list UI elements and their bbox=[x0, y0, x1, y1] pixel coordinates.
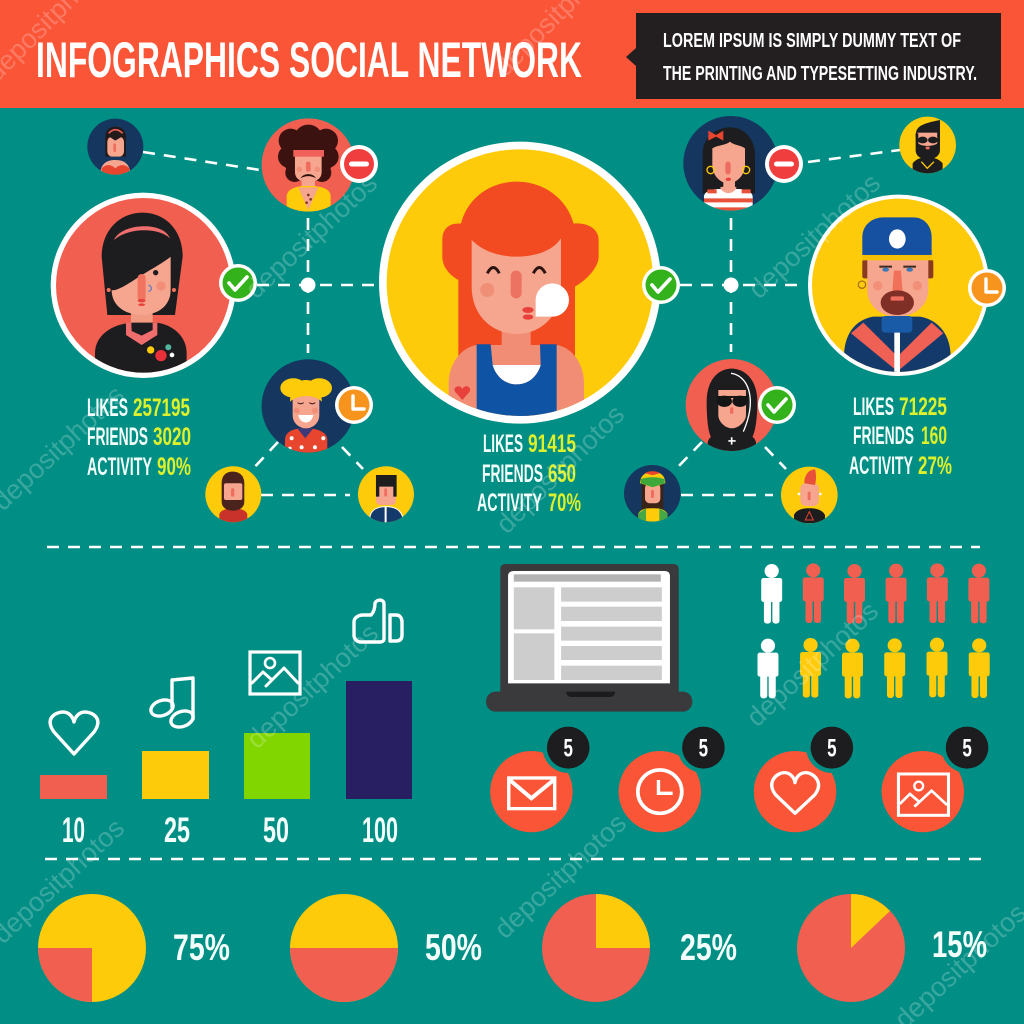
watermarks: depositphotos bbox=[741, 596, 884, 732]
avatar: woman with bow and striped top bbox=[683, 116, 778, 213]
stats: right person bbox=[849, 393, 952, 480]
clock badge: right bbox=[968, 269, 1006, 307]
header banner bbox=[0, 0, 1024, 108]
watermarks: depositphotos bbox=[241, 618, 384, 754]
stats: left person: LIKES bbox=[87, 394, 128, 422]
stats: left person: ACTIVITY bbox=[87, 453, 152, 481]
check badge: right bbox=[758, 386, 796, 424]
pie 15% bbox=[797, 894, 987, 1002]
minus badge: left bbox=[340, 145, 378, 183]
people pictogram rows bbox=[757, 563, 990, 698]
bar 100 with thumbs-up icon bbox=[346, 600, 412, 850]
stats: central person: 70% bbox=[548, 489, 581, 517]
notification: mail bbox=[490, 722, 594, 832]
watermarks: depositphotos bbox=[490, 399, 630, 539]
avatar: central woman with red hair bbox=[379, 142, 661, 424]
bar 25 with music icon: 25 bbox=[164, 811, 190, 850]
bar 25 with music icon bbox=[142, 678, 209, 850]
avatar: man with afro bbox=[262, 118, 355, 212]
bar 50 with image icon bbox=[244, 652, 310, 850]
stats: central person: 91415 bbox=[528, 430, 576, 458]
stats: right person: 27% bbox=[918, 452, 952, 480]
stats: central person: LIKES bbox=[483, 430, 523, 458]
clock badge: left bbox=[335, 386, 373, 424]
avatar: right man with blue cap bbox=[808, 195, 989, 377]
stats: right person: LIKES bbox=[853, 393, 894, 421]
avatar: woman in black hood with sunglasses bbox=[686, 359, 778, 453]
avatar: punk with mohawk bbox=[781, 467, 838, 523]
avatar: rasta man bbox=[624, 465, 681, 523]
bar chart bbox=[40, 600, 412, 850]
stats: right person: 71225 bbox=[899, 393, 947, 421]
bar 10 with heart icon: 10 bbox=[62, 811, 85, 850]
pie 25% bbox=[542, 894, 737, 1002]
check badge: central bbox=[642, 266, 680, 304]
stats: left person: 257195 bbox=[133, 394, 190, 422]
stats: left person: FRIENDS bbox=[87, 423, 148, 451]
watermarks: depositphotos bbox=[240, 168, 383, 304]
stats: central person: ACTIVITY bbox=[477, 489, 542, 517]
pie 50% bbox=[290, 894, 482, 1002]
avatar: man in track jacket bbox=[358, 466, 414, 523]
stats: right person: ACTIVITY bbox=[849, 452, 913, 480]
network connector lines bbox=[143, 150, 900, 495]
stats: central person: FRIENDS bbox=[482, 460, 543, 488]
watermarks: depositphotos bbox=[743, 168, 886, 304]
notification: mail: 5 bbox=[563, 735, 573, 762]
title: INFOGRAPHICS SOCIAL NETWORK bbox=[36, 32, 582, 88]
avatar: bearded man in plaid bbox=[205, 466, 261, 523]
notification: clock bbox=[619, 722, 729, 832]
notification: image: 5 bbox=[962, 735, 972, 762]
minus badge: right bbox=[765, 145, 803, 183]
stats: left person: 3020 bbox=[153, 423, 191, 451]
laptop bbox=[486, 564, 692, 712]
pie 15%: 15% bbox=[932, 924, 987, 965]
notification: heart bbox=[754, 722, 858, 832]
row: yellow people bbox=[757, 638, 990, 698]
notification: image bbox=[882, 722, 993, 832]
avatar: blonde girl in polka dots bbox=[262, 359, 355, 453]
bar 10 with heart icon bbox=[40, 712, 107, 850]
pie 25%: 25% bbox=[680, 927, 737, 968]
check badge: left bbox=[219, 264, 257, 302]
watermarks: depositphotos bbox=[489, 808, 632, 944]
pie 75% bbox=[38, 894, 230, 1002]
stats: right person: FRIENDS bbox=[853, 422, 914, 450]
stats: left person bbox=[87, 394, 191, 481]
notification icons bbox=[490, 722, 993, 832]
stats: left person: 90% bbox=[157, 453, 191, 481]
avatar: small woman in red dress bbox=[87, 119, 143, 177]
bar 50 with image icon: 50 bbox=[263, 811, 289, 850]
stats: central person: 650 bbox=[548, 460, 576, 488]
bar 100 with thumbs-up icon: 100 bbox=[362, 811, 398, 850]
pie 50%: 50% bbox=[425, 927, 482, 968]
avatar: man with beard and sunglasses bbox=[899, 117, 956, 175]
row: red people bbox=[761, 563, 989, 624]
stats: central person bbox=[477, 430, 581, 517]
stats: right person: 160 bbox=[921, 422, 947, 450]
avatar: left woman with black hair bbox=[51, 193, 236, 378]
notification: clock: 5 bbox=[699, 735, 708, 762]
pie 75%: 75% bbox=[173, 927, 230, 968]
notification: heart: 5 bbox=[827, 735, 837, 762]
header description box bbox=[626, 13, 1001, 99]
pie charts bbox=[38, 894, 987, 1002]
